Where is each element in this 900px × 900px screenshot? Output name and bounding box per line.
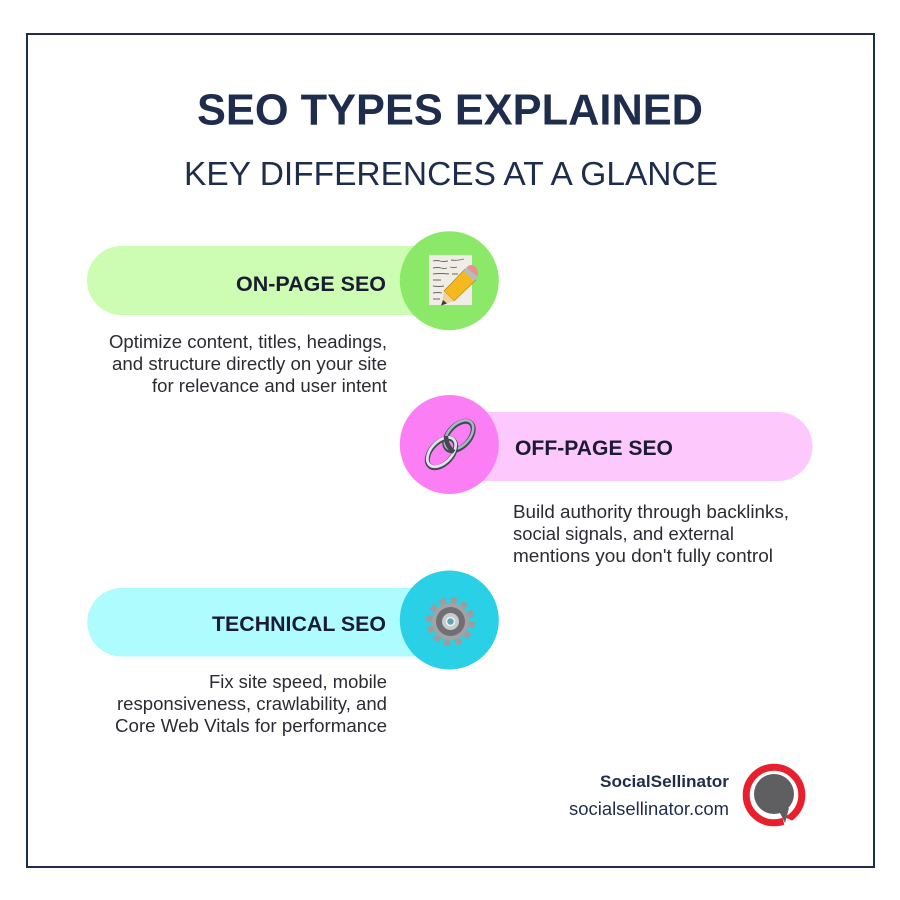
panel: off-page SEO: [400, 395, 813, 566]
description: technical: responsiveness, crawlability, and: [117, 694, 387, 714]
label: on-page: ON-PAGE SEO: [236, 272, 386, 296]
description: technical: Core Web Vitals for performance: [115, 716, 387, 736]
label: off-page: OFF-PAGE SEO: [515, 436, 673, 460]
pill: off-page: [449, 412, 813, 481]
pill: on-page: [87, 246, 450, 315]
description: off-page: social signals, and external: [513, 524, 734, 544]
icon: gear: [430, 601, 471, 642]
description: technical: Fix site speed, mobile: [209, 672, 387, 692]
description: off-page: Build authority through backlinks,: [513, 502, 789, 522]
label: technical: TECHNICAL SEO: [212, 612, 386, 636]
icon circle: technical: [400, 570, 499, 670]
panel: technical SEO: [87, 570, 499, 736]
icon: SocialSellinator logo: [746, 767, 802, 827]
icon circle: on-page: [400, 231, 499, 330]
description: on-page: [109, 332, 387, 396]
description: off-page: [513, 502, 789, 566]
description: off-page: mentions you don't fully control: [513, 546, 773, 566]
panel: on-page SEO: [87, 231, 499, 396]
pill: technical: [87, 588, 450, 656]
description: on-page: and structure directly on your site: [112, 354, 387, 374]
footer brand name: SocialSellinator: [600, 772, 729, 791]
description: on-page: Optimize content, titles, headings,: [109, 332, 387, 352]
footer website: socialsellinator.com: [569, 799, 729, 819]
icon: memo and pencil: [429, 255, 478, 306]
description: technical: [115, 672, 387, 736]
subtitle: KEY DIFFERENCES AT A GLANCE: [184, 156, 718, 193]
icon circle: off-page: [400, 395, 499, 494]
icon: chain links: [422, 415, 479, 473]
description: on-page: for relevance and user intent: [152, 376, 387, 396]
title: SEO TYPES EXPLAINED: [197, 86, 703, 134]
